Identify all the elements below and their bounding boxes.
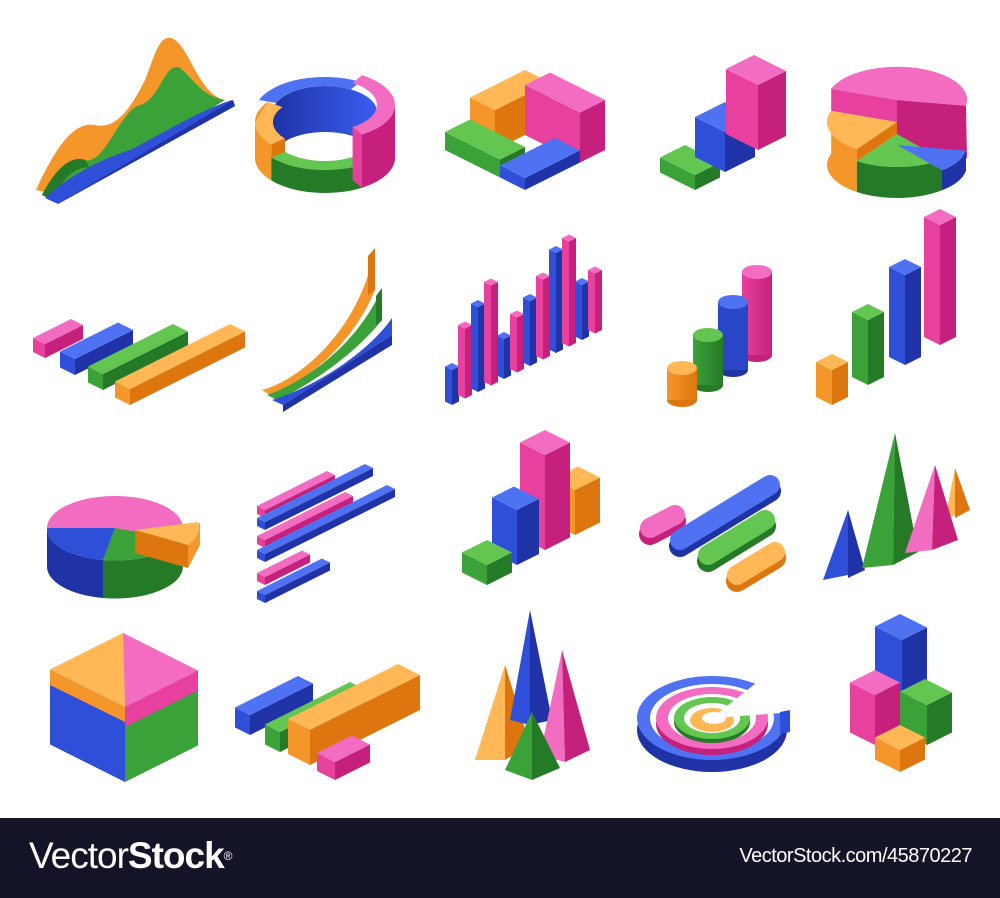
icon: ring chart xyxy=(255,75,395,193)
icon: cube cluster xyxy=(850,614,952,772)
icon: stair boxes xyxy=(660,55,786,190)
icon: triangle peaks xyxy=(823,433,970,580)
icon: split cube xyxy=(50,633,198,782)
icon: concentric rings xyxy=(637,672,800,772)
icon: horizontal isometric bars xyxy=(33,319,245,405)
icon: square block ring xyxy=(445,70,605,190)
icon: increasing bars xyxy=(816,209,956,405)
icon: wave area chart xyxy=(36,38,235,204)
footer logo: VectorStock® xyxy=(29,835,232,876)
icon: stacked thin bars xyxy=(257,464,395,603)
icon: box bar chart xyxy=(462,430,600,585)
icon: cone peaks xyxy=(475,610,590,780)
icon: cylinder bars xyxy=(667,265,772,407)
icon: long isometric bars xyxy=(235,664,420,780)
icon: pie cylinder xyxy=(827,67,967,198)
icon: multi bar chart xyxy=(445,234,602,405)
icon: pie chart with exploded slice xyxy=(47,496,200,599)
icon: rising curve area xyxy=(262,248,392,412)
footer bar xyxy=(0,818,1000,898)
icon: rounded pill bars xyxy=(650,485,775,581)
footer url: VectorStock.com/45870227 xyxy=(739,845,972,867)
